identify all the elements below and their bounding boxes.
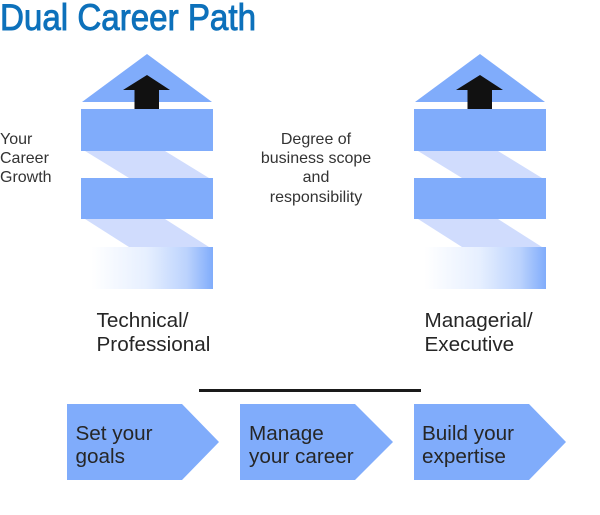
roof triangle xyxy=(415,54,545,102)
middle bar xyxy=(414,178,546,219)
step: set your goals xyxy=(67,404,219,480)
upper bar xyxy=(81,109,213,151)
divider line xyxy=(199,389,421,392)
label: technical/professional: Professional xyxy=(96,333,210,356)
faded bottom bar xyxy=(81,247,213,289)
faded bottom bar xyxy=(414,247,546,289)
icon: up arrow xyxy=(123,75,170,109)
label: degree of business scope and responsibility: and xyxy=(303,169,329,186)
lower connector xyxy=(85,219,209,247)
icon: up arrow xyxy=(456,75,503,109)
step: manage your career: Manage xyxy=(249,422,324,445)
label: degree of business scope and responsibility: Degree of xyxy=(281,131,352,148)
stacked diagram: technical path xyxy=(81,54,213,289)
step: build your expertise xyxy=(414,404,566,480)
lower connector xyxy=(418,219,542,247)
label: managerial/executive: Executive xyxy=(424,333,514,356)
step: build your expertise: expertise xyxy=(422,445,506,468)
label: managerial/executive: Managerial/ xyxy=(424,309,533,332)
step: manage your career xyxy=(240,404,393,480)
label: technical/professional: Technical/ xyxy=(96,309,189,332)
stacked diagram: managerial path xyxy=(414,54,546,289)
step: manage your career: your career xyxy=(249,445,354,468)
upper connector xyxy=(85,151,209,178)
roof triangle xyxy=(82,54,212,102)
step: set your goals: goals xyxy=(76,445,125,468)
label: degree of business scope and responsibility: responsibility xyxy=(270,189,362,206)
middle bar xyxy=(81,178,213,219)
step: set your goals: Set your xyxy=(76,422,153,445)
label: your career growth: Your xyxy=(0,131,33,148)
upper bar xyxy=(414,109,546,151)
label: degree of business scope and responsibility: business scope xyxy=(261,150,371,167)
upper connector xyxy=(418,151,542,178)
label: your career growth: Growth xyxy=(0,169,52,186)
label: your career growth: Career xyxy=(0,150,50,167)
step: build your expertise: Build your xyxy=(422,422,514,445)
